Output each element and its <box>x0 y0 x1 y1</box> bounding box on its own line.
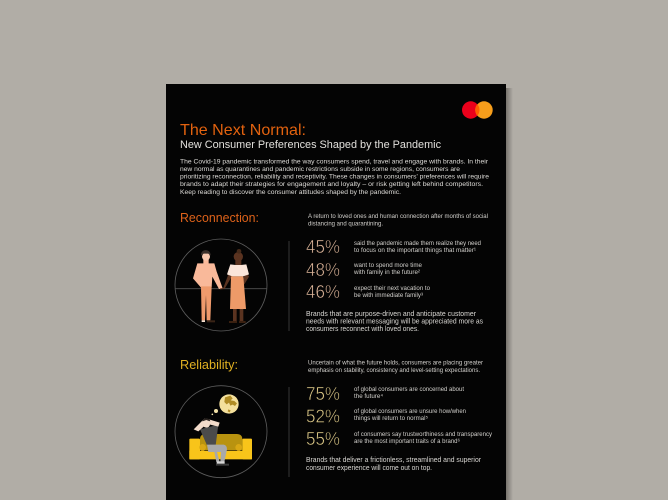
stat: 55% <box>306 429 493 449</box>
person <box>194 418 229 466</box>
text: reliability lead: Uncertain of what the future holds, consumers are placing greater <box>308 360 484 366</box>
intro text block: brands to adapt their strategies for engagement and loyalty – or risk getting left behind competitors. <box>180 181 483 188</box>
text: reconnection takeaway: consumers reconnect with loved ones. <box>306 324 419 333</box>
sofa <box>189 434 252 459</box>
woman <box>220 249 249 323</box>
stat: 45%: said the pandemic made them realize they need <box>354 240 481 247</box>
stat: 52%: 52% <box>306 406 340 426</box>
stat: 46%: expect their next vacation to <box>354 285 430 292</box>
text: reliability takeaway <box>306 455 482 472</box>
intro text block: Keep reading to discover the consumer attitudes shaped by the pandemic. <box>180 189 401 196</box>
stat: 45%: 45% <box>306 237 340 257</box>
stat: 45% <box>306 237 481 257</box>
stat: 46%: be with immediate family³ <box>354 292 423 299</box>
stat: 75%: 75% <box>306 384 340 404</box>
stat: 48%: want to spend more time <box>353 262 422 269</box>
stat: 55%: 55% <box>306 429 340 449</box>
icon: Mastercard logo <box>462 101 493 119</box>
illustration: couple holding hands in circle <box>175 239 267 331</box>
text: reconnection lead: distancing and quarantining. <box>308 220 383 228</box>
text: reconnection takeaway <box>306 309 483 333</box>
stat: 75% <box>306 384 464 404</box>
text: reliability takeaway: Brands that deliver a frictionless, streamlined and superior <box>306 455 482 464</box>
stat: 46% <box>306 282 430 302</box>
text: reconnection lead: A return to loved ones and human connection after months of social <box>308 213 488 220</box>
text: reconnection takeaway: needs with relevant messaging will be appreciated more as <box>306 316 483 326</box>
divider: reliability stats <box>288 387 290 477</box>
stat: 75%: the future⁴ <box>354 393 383 400</box>
heading: Reliability: Reliability: <box>180 357 238 372</box>
stat: 48%: 48% <box>306 260 340 280</box>
stat: 48% <box>306 260 422 280</box>
stat: 45%: to focus on the important things that matter¹ <box>354 247 476 254</box>
text: reconnection takeaway: Brands that are purpose-driven and anticipate customer <box>306 309 477 318</box>
stat: 52%: of global consumers are unsure how/when <box>354 408 466 415</box>
intro text block: prioritizing reconnection, reliability and receptivity. These changes in consumers' preferences will require <box>180 174 489 180</box>
man <box>193 250 223 322</box>
title: The Next Normal: <box>180 122 306 139</box>
thought bubbles and globe <box>211 394 239 415</box>
intro text block: new normal as quarantines and pandemic restrictions subside in some regions, consumers are <box>180 166 460 173</box>
heading: Reconnection: Reconnection: <box>180 210 259 225</box>
stat: 75%: of global consumers are concerned about <box>354 386 464 393</box>
text: reliability lead <box>308 360 484 374</box>
divider: reconnection stats <box>288 241 290 331</box>
stat: 55%: of consumers say trustworthiness and transparency <box>354 431 493 438</box>
stat: 55%: are the most important traits of a brand⁶ <box>354 438 460 445</box>
intro text block <box>180 158 489 196</box>
illustration: person on sofa thinking about globe <box>175 386 267 478</box>
stat: 52%: things will return to normal⁵ <box>354 415 428 422</box>
stat: 48%: with family in the future² <box>353 269 420 276</box>
text: reliability takeaway: consumer experience will come out on top. <box>306 463 432 472</box>
panel: document page <box>166 84 506 500</box>
text: reliability lead: emphasis on stability, consistency and level-setting expectations. <box>308 367 480 374</box>
intro text block: The Covid-19 pandemic transformed the way consumers spend, travel and engage with brands. In their <box>180 158 489 166</box>
text: reconnection lead <box>308 213 488 228</box>
stat: 46%: 46% <box>306 282 340 302</box>
stat: 52% <box>306 406 466 426</box>
subtitle: New Consumer Preferences Shaped by the Pandemic <box>180 139 441 151</box>
